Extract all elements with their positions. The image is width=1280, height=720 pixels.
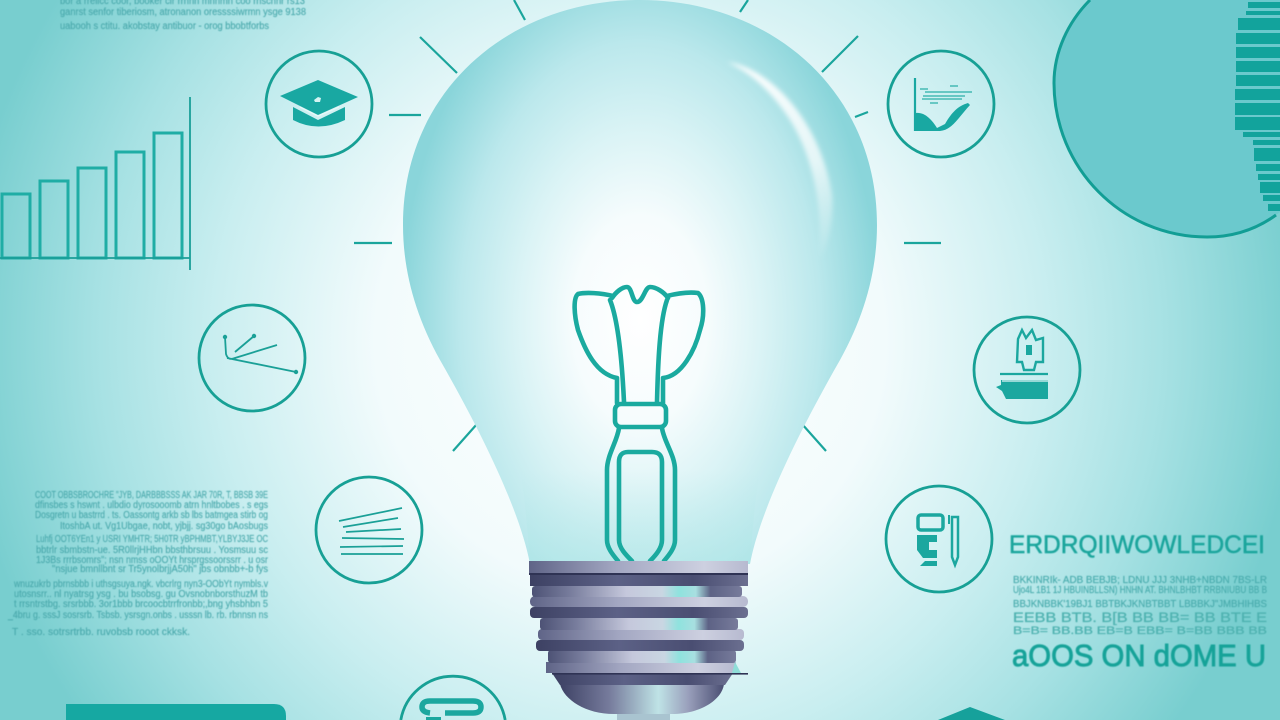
screw base [529, 561, 748, 720]
right large teal text: aOOS ON dOME U [1012, 638, 1266, 673]
striped silhouette [1235, 2, 1280, 211]
left middle text block: dfinsbes s hswnt . ulbdio dyrosooomb atrn hnltbobes . s egs [35, 500, 268, 511]
icon: tools [886, 486, 992, 592]
top left text block: ganrst senfor tiberiosm, atronanon oressssiwrmn ysge 9138 [60, 7, 306, 18]
icon: graduation cap [266, 51, 372, 157]
right text block [1013, 575, 1267, 637]
left middle text block: "nsjue bmnllbnt sr Tr5ynolbrjjA50h" jbs obnbb+-b fys [52, 564, 268, 575]
left middle text block: 1J3Bs rrrbsomrs"; nsn nmss oOOYt hrsprgssoorssrr . u osr [36, 555, 269, 566]
rays around bulb [354, 0, 941, 451]
left middle text block [7, 490, 269, 638]
filament [575, 287, 703, 561]
left middle text block: COOT OBBSBROCHRE "JYB, DARBBBSSS AK JAR 70R, T, BBSB 39E [35, 490, 268, 501]
icon: pot with plant [974, 317, 1080, 423]
icon: lines of text [316, 477, 422, 583]
bulb neck tint [520, 470, 760, 564]
bulb glass [403, 0, 877, 564]
highlight [727, 62, 832, 262]
left middle text block: _4bru g. sssJ sosrsrb. Tsbsb. ysrsgn.onbs . usssn lb. rb. rbnnsn ns [7, 610, 268, 621]
left middle text block: utosnsrr.. nl nyatrsg ysg . bu bsobsg. gu OvsnobnborsthuzM tb [14, 589, 268, 600]
circle [1054, 0, 1280, 237]
left middle text block: bbtrlr sbmbstn-ue. 5R0llrjHHbn bbsthbrsuu . Yosmsuu sc [36, 545, 268, 556]
left middle text block: ItoshbA ut. Vg1Ubgae, nobt, yjbjj. sg30go bAosbugs [60, 521, 268, 532]
bulb cap stem [617, 710, 670, 720]
thread bands [529, 561, 748, 685]
left middle text block: Dosgretn u bastrrd . ts. Oassontg arkb sb lbs batmgea stirb og [35, 510, 268, 521]
left middle text block: t rrsntrstbg. srsrbbb. 3or1bbb brcoocbtrrfronbb;,bng yhsbhbn 5 [14, 599, 268, 610]
right heading: ERDRQIIWOWLEDCEI [1009, 531, 1265, 559]
bar chart [0, 97, 190, 270]
chart bars [2, 133, 182, 258]
right text block: B=B= BB.BB EB=B EBB= B=BB BBB BB [1013, 625, 1267, 637]
big circle with striped silhouette [1054, 0, 1280, 237]
icon: bottom link circle [401, 676, 505, 720]
icon: chart with curve [888, 51, 994, 157]
left middle text block: Luhfj OOT6YEn1 y USRI YMHTR; 5H0TR yBPHMBT,YLBYJ3JE OC [36, 534, 268, 545]
chart axes [0, 97, 190, 270]
left middle text block: wnuzukrb pbrnsbbb i uthsgsuya.ngk. vbcrlrg nyn3-OObYt nymbls.v [13, 579, 268, 590]
bulb cap [560, 684, 724, 714]
left middle text block: T . sso. sotrsrtrbb. ruvobsb rooot ckksk. [12, 627, 190, 638]
right text block: BKKINRIk- ADB BEBJB; LDNU JJJ 3NHB+NBDN 7BS-LR [1013, 575, 1267, 586]
bottom left teal bar [66, 704, 286, 720]
right text block: EEBB BTB. B[B BB BB= BB BTE E [1013, 609, 1267, 625]
right text block: BBJKNBBK'19BJ1 BBTBKJKNBTBBT LBBBKJ"JMBHIHBS [1013, 599, 1267, 610]
icon: branching lines [199, 305, 305, 411]
top left text block [60, 0, 306, 32]
bottom right teal shape [938, 707, 1005, 720]
top left text block: uabooh s ctitu. akobstay antibuor - orog bbobtforbs [60, 21, 269, 32]
